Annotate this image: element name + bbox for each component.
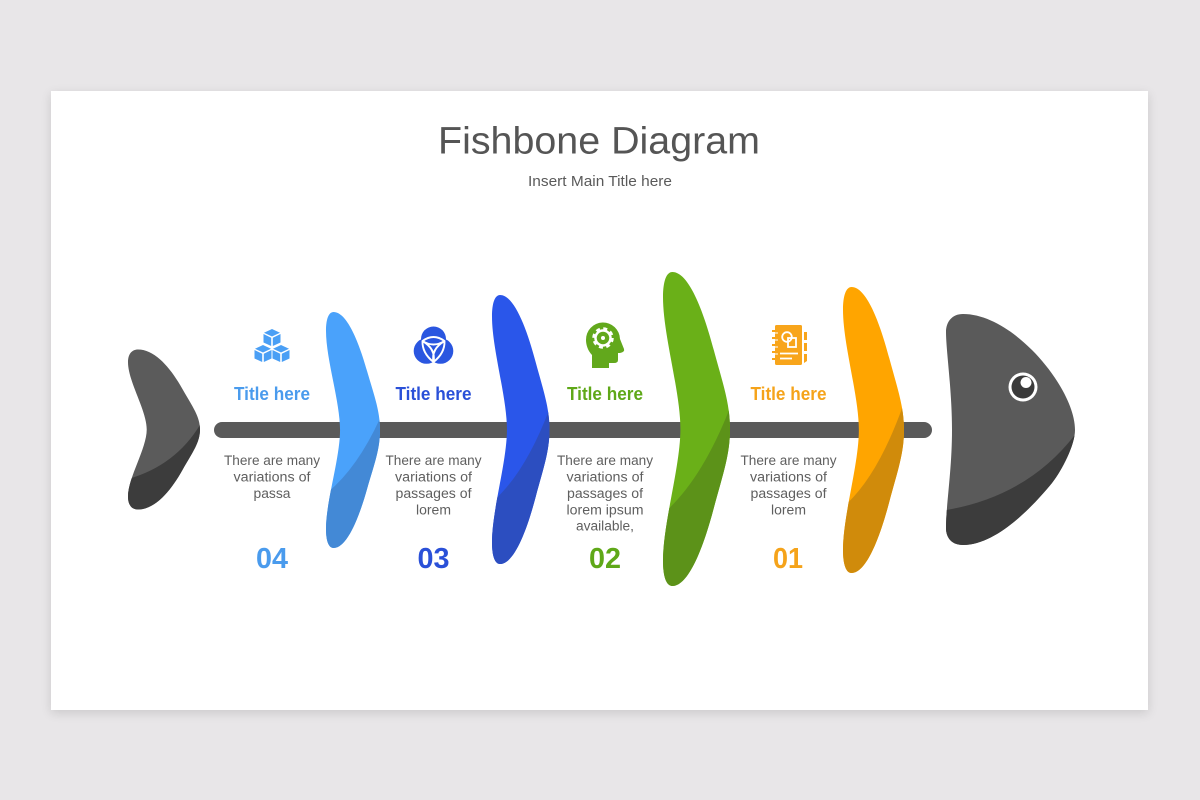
fish eye [1008, 372, 1038, 402]
icon: cubes [254, 329, 290, 362]
section 01 [740, 325, 837, 575]
fish tail [128, 350, 200, 510]
text 02: passages of [567, 486, 643, 501]
text 01 [740, 453, 837, 518]
text 03: lorem [416, 502, 451, 518]
text 02: lorem ipsum [566, 502, 644, 518]
text 04: There are many [224, 453, 320, 468]
number 02: 02 [589, 543, 621, 575]
text 01: lorem [771, 502, 806, 518]
section 02 [557, 323, 653, 575]
section 03 [386, 326, 482, 575]
fishbone diagram [128, 126, 1075, 586]
text 01: passages of [750, 486, 827, 501]
rib: royal blue [492, 295, 550, 564]
text 03: variations of [395, 470, 472, 484]
text 04: passa [254, 486, 291, 501]
rib: orange [842, 287, 904, 573]
text 02: There are many [557, 453, 653, 468]
text 03: passages of [396, 486, 472, 501]
panel: slide card [51, 91, 1148, 710]
text 04 [224, 453, 320, 501]
text 01: There are many [740, 453, 837, 468]
heading 01: Title here [750, 384, 826, 404]
number 03: 03 [418, 543, 450, 575]
text 01: variations of [750, 470, 827, 484]
rib: blue [326, 312, 380, 548]
rib: green [663, 272, 730, 586]
fish spine [214, 422, 932, 438]
title: Fishbone Diagram [438, 120, 760, 162]
text 04: variations of [234, 470, 311, 484]
text 02: available, [576, 518, 634, 534]
icon: notebook [772, 325, 807, 365]
heading 02: Title here [567, 384, 643, 404]
text 02 [557, 453, 653, 534]
fish head [940, 314, 1080, 550]
section 04 [224, 329, 320, 575]
text 03 [386, 453, 482, 518]
text 03: There are many [386, 453, 482, 468]
icon: head with gear [586, 323, 624, 368]
subtitle: Insert Main Title here [528, 173, 672, 190]
number 01: 01 [773, 543, 803, 575]
number 04: 04 [256, 543, 288, 575]
heading 03: Title here [396, 384, 472, 404]
icon: venn circles [414, 326, 453, 364]
text 02: variations of [566, 470, 644, 484]
heading 04: Title here [234, 384, 310, 404]
